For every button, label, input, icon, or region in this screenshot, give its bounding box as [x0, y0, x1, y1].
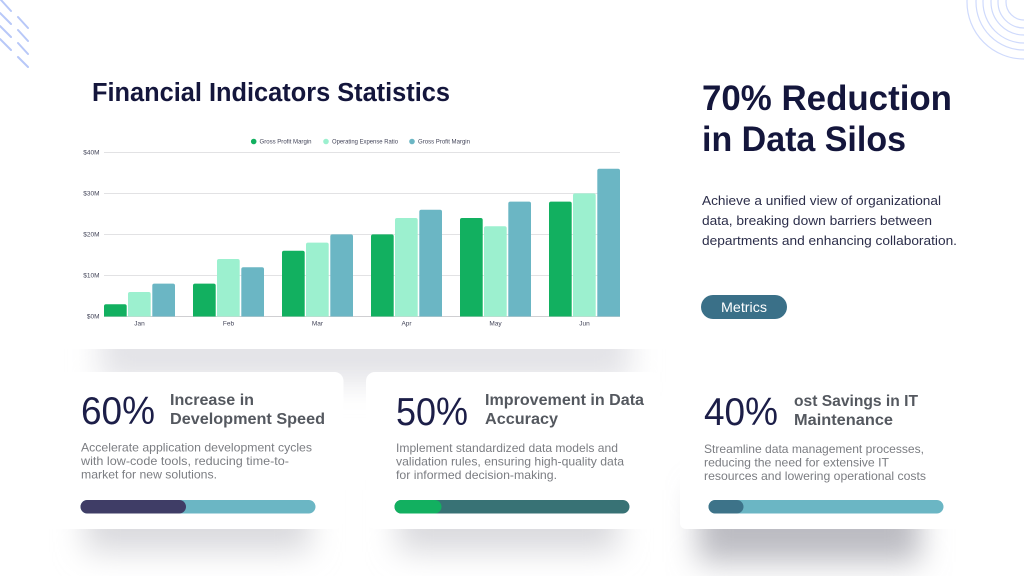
- x axis labels: May: [489, 320, 502, 328]
- card text: [396, 441, 624, 482]
- decoration: concentric arcs top right: [967, 0, 1024, 59]
- x axis labels: [134, 320, 590, 328]
- card heading: ost Savings in IT: [794, 393, 919, 410]
- card: 40%: [680, 360, 980, 529]
- card: 60%: [40, 372, 344, 529]
- description text: data, breaking down barriers between: [702, 213, 932, 228]
- card heading: Improvement in Data: [485, 392, 644, 409]
- bars: Gross Profit Margin: [104, 202, 572, 316]
- description text: Achieve a unified view of organizational: [702, 193, 941, 208]
- card heading: Maintenance: [794, 412, 893, 429]
- button: Metrics: [701, 295, 787, 319]
- headline: in Data Silos: [702, 120, 906, 159]
- progress bar: [80, 500, 316, 514]
- card heading: [170, 392, 325, 428]
- x axis labels: Jan: [134, 320, 145, 328]
- card text: reducing the need for extensive IT: [704, 456, 890, 470]
- card heading: Development Speed: [170, 411, 325, 428]
- card heading: Increase in: [170, 392, 254, 409]
- card text: Accelerate application development cycles: [81, 440, 312, 454]
- progress bar: [708, 500, 944, 514]
- card heading: [794, 393, 919, 429]
- headline: [702, 79, 952, 159]
- y axis labels: $20M: [83, 232, 100, 238]
- decoration: diagonal lines top left: [0, 0, 28, 67]
- y axis labels: $0M: [87, 314, 100, 320]
- stat value: 50%: [396, 391, 468, 434]
- card text: for informed decision-making.: [396, 468, 557, 482]
- y axis labels: $40M: [83, 150, 100, 156]
- x axis labels: Apr: [401, 320, 412, 328]
- chart legend: Gross Profit Margin: [260, 138, 312, 146]
- card: 50%: [366, 372, 660, 529]
- chart grid lines: [104, 152, 620, 316]
- button: Metrics: Metrics: [721, 299, 767, 315]
- x axis labels: Feb: [223, 320, 234, 328]
- title: Financial Indicators Statistics: [92, 79, 450, 107]
- bars: Operating Expense Ratio: [128, 193, 596, 316]
- stat value: 60%: [81, 390, 155, 433]
- shadow under chart panel: [100, 310, 630, 382]
- x axis labels: Jun: [579, 320, 590, 328]
- panel: bar chart: [40, 125, 670, 349]
- description text: departments and enhancing collaboration.: [702, 233, 957, 248]
- description text: [702, 193, 957, 248]
- card text: market for new solutions.: [81, 468, 217, 482]
- x axis labels: Mar: [312, 320, 324, 328]
- card text: [80, 440, 312, 482]
- progress bar: [394, 500, 630, 514]
- headline: 70% Reduction: [702, 79, 952, 118]
- card text: Implement standardized data models and: [396, 441, 618, 455]
- card text: [704, 442, 926, 483]
- bars: Gross Profit Margin, second series: [152, 169, 620, 316]
- card text: Streamline data management processes,: [704, 442, 924, 456]
- card text: with low-code tools, reducing time-to-: [80, 454, 289, 468]
- chart legend: [251, 138, 471, 146]
- card text: resources and lowering operational costs: [704, 469, 926, 483]
- stat value: 40%: [704, 391, 778, 434]
- card heading: [485, 392, 644, 428]
- card heading: Accuracy: [485, 411, 558, 428]
- y axis labels: $10M: [83, 272, 100, 280]
- shadows under cards: [85, 490, 920, 562]
- chart legend: Gross Profit Margin: [418, 138, 471, 146]
- card text: validation rules, ensuring high-quality data: [396, 454, 624, 468]
- y axis labels: $30M: [83, 190, 100, 198]
- chart legend: Operating Expense Ratio: [332, 138, 399, 146]
- y axis labels: [83, 150, 100, 320]
